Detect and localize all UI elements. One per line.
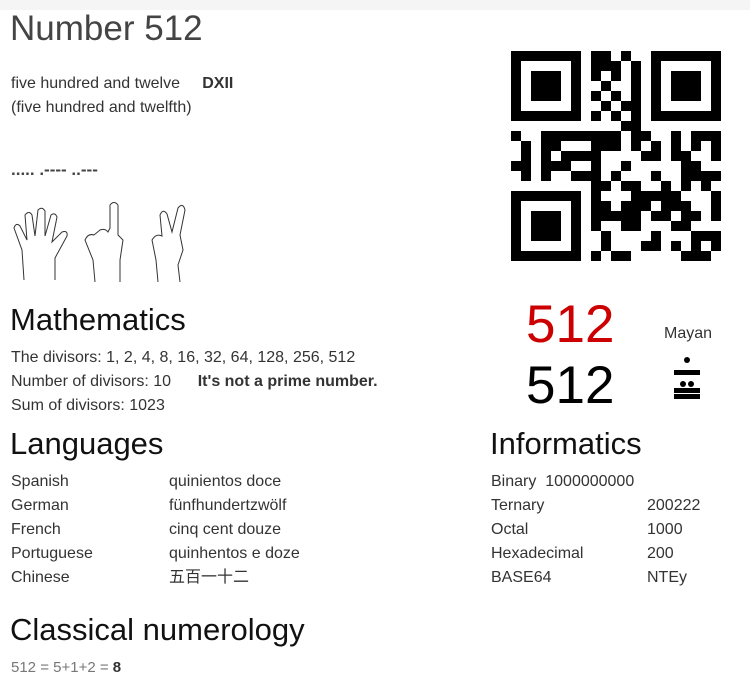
heading: Languages: Languages (10, 426, 163, 461)
text: NTEy (647, 569, 687, 586)
text: divisors: Sum of divisors: 1023 (11, 397, 165, 414)
text: quinientos doce (169, 473, 281, 490)
text: name: (five hundred and twelfth) (11, 99, 192, 116)
text: 1000 (647, 521, 683, 538)
text: French (11, 521, 61, 538)
heading: Mathematics: Mathematics (10, 302, 186, 337)
text: Hexadecimal (491, 545, 583, 562)
text: Ternary (491, 497, 544, 514)
text: divisors (11, 349, 378, 414)
number red: 512 (526, 295, 614, 354)
text: quinhentos e doze (169, 545, 300, 562)
title: Number 512 (10, 9, 203, 48)
heading: Classical numerology: Classical numerology (10, 612, 305, 647)
text: Binary 1000000000 (491, 473, 634, 490)
Mayan label: Mayan (664, 325, 712, 342)
QR code (511, 51, 721, 261)
text: German (11, 497, 69, 514)
number black: 512 (526, 356, 614, 415)
text: numerology: 512 = 5+1+2 = 8 (11, 659, 121, 676)
table: informatics (491, 473, 700, 586)
text: Octal (491, 521, 528, 538)
text: divisors: Number of divisors: 10 It's not a prime number. (11, 373, 378, 390)
text: BASE64 (491, 569, 551, 586)
text: name: five hundred and twelve DXII (11, 75, 233, 92)
text: Spanish (11, 473, 69, 490)
text: Chinese (11, 569, 70, 586)
text: cinq cent douze (169, 521, 281, 538)
table: languages (11, 473, 300, 586)
text: 五百一十二 (169, 569, 249, 586)
text: 200 (647, 545, 674, 562)
text: divisors: The divisors: 1, 2, 4, 8, 16, 32, 64, 128, 256, 512 (11, 349, 355, 366)
icon: sign language hands (14, 202, 186, 282)
text: fünfhundertzwölf (169, 497, 286, 514)
text: 200222 (647, 497, 700, 514)
text: Portuguese (11, 545, 93, 562)
heading: Informatics: Informatics (490, 426, 642, 461)
morse code: ..... .---- ..--- (11, 160, 98, 179)
icon: mayan numeral (674, 357, 700, 399)
text: name (11, 75, 233, 116)
